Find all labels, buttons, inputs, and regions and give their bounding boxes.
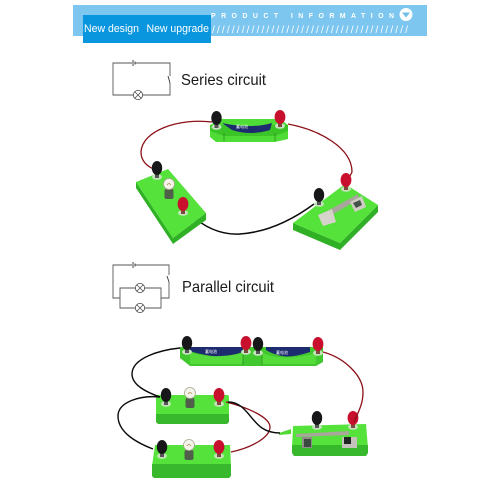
banner label: product information: PRODUCT INFORMATION [211, 13, 394, 20]
battery holder pair: 蓄电池 [205, 348, 217, 354]
switch board [279, 411, 368, 456]
illustration: series circuit [136, 110, 378, 250]
lamp board bottom [152, 440, 231, 478]
heading: parallel circuit: Parallel circuit [182, 279, 275, 296]
switch board [293, 173, 378, 250]
diagram: series circuit schematic [113, 60, 170, 100]
wire: black lamp to lamp [118, 397, 160, 449]
battery holder pair: 蓄电池 [276, 349, 288, 355]
heading tab: new design new upgrade: New design [84, 23, 139, 35]
battery holder [210, 110, 288, 142]
diagram: parallel circuit schematic [113, 262, 169, 313]
banner hatch pattern: //////////////////////////////////////// [212, 25, 408, 36]
battery holder: 蓄电池 [236, 123, 248, 129]
illustration: parallel circuit [118, 336, 368, 478]
wire: red battery to switch [323, 352, 363, 422]
lamp board [136, 161, 206, 244]
wire: red lamp to lamp [226, 402, 270, 452]
wire: black lamp to switch [228, 402, 280, 433]
wire: red left [141, 121, 212, 170]
heading: series circuit: Series circuit [181, 72, 267, 89]
icon: triangle badge [400, 8, 412, 21]
lamp board top [156, 388, 229, 424]
battery holder pair [180, 336, 323, 366]
heading tab: new design new upgrade [83, 15, 211, 43]
wire: red right [288, 124, 352, 178]
banner: product information [73, 5, 427, 36]
wire: black battery to lamp [132, 348, 180, 397]
heading tab: new design new upgrade: New upgrade [146, 23, 209, 35]
wire: black [190, 204, 314, 234]
